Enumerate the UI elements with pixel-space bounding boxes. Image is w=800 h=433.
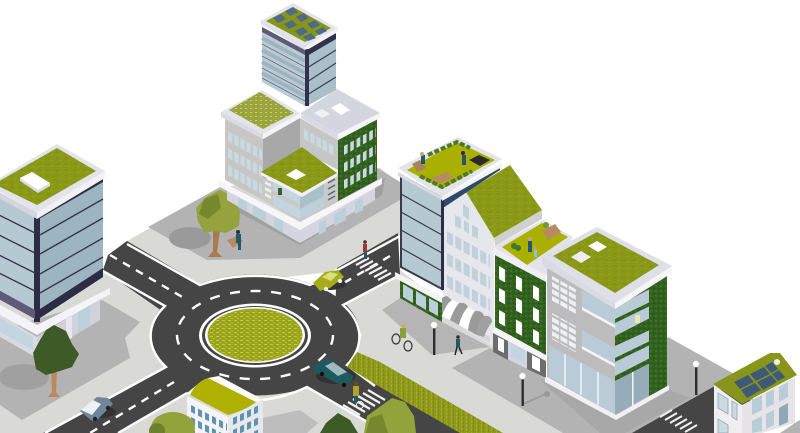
- corner building with ivy bands: [542, 227, 672, 420]
- tree: right bottom: [364, 398, 416, 433]
- gable wall: [443, 192, 494, 347]
- base slab: [545, 377, 669, 420]
- wall windows: [499, 266, 546, 356]
- cyclist: sidewalk: [392, 324, 412, 351]
- bottom trees: [149, 398, 416, 433]
- roof terrace: [493, 220, 573, 282]
- shop windows under awnings: [447, 312, 490, 343]
- pedestrian: sidewalk: [455, 335, 462, 355]
- gable roof: [466, 165, 542, 238]
- tree: left bottom: [149, 412, 195, 433]
- roof: [542, 227, 672, 309]
- glass tower with roof garden: [395, 137, 502, 322]
- hedge along road: [347, 352, 503, 433]
- roundabout island: [199, 304, 311, 368]
- tree: light green with bench: [169, 190, 240, 257]
- car: silver: [80, 397, 116, 421]
- crosswalk: north-east: [356, 258, 391, 280]
- small house with solar roof: [713, 353, 797, 433]
- bottom yellow-roof building: [187, 376, 263, 433]
- person on bench: [227, 230, 243, 250]
- roof: [0, 144, 105, 219]
- base walls: [0, 288, 110, 358]
- flower roof slab: [221, 90, 300, 139]
- left office building with green roof: [0, 144, 110, 358]
- ground: plazas: [0, 168, 800, 433]
- terrace with green roof: [261, 147, 338, 222]
- street lamp 3: [693, 361, 699, 395]
- car: teal: [312, 358, 356, 387]
- roof: [398, 137, 502, 201]
- ivy-wall building with roof terrace: [493, 220, 573, 378]
- top glass tower: [261, 3, 338, 106]
- tree: dark bottom: [320, 413, 358, 433]
- ground: sidewalks: [0, 168, 572, 433]
- crosswalk: far right: [660, 410, 697, 432]
- roundabout and roads: [43, 233, 750, 433]
- car: yellow: [313, 270, 346, 291]
- base: [493, 327, 546, 378]
- left face: [547, 265, 615, 415]
- street lamp 1: [431, 322, 437, 355]
- main walls: [225, 118, 377, 201]
- central complex: [218, 3, 382, 243]
- light roof slab: [301, 89, 380, 140]
- upper gable windows: [455, 204, 478, 239]
- crosswalk: south-east: [343, 390, 385, 415]
- striped awnings: [437, 296, 492, 337]
- glass faces: [0, 176, 103, 322]
- glass face: [401, 175, 444, 290]
- road edge lines: [45, 236, 400, 433]
- pedestrian: crosswalk north-east: [363, 240, 367, 259]
- tree: dark green: [0, 325, 79, 397]
- roof lip: [494, 210, 542, 246]
- ivy wall: [495, 255, 546, 355]
- cyclist: crosswalk: [353, 382, 364, 408]
- awnings and gabled building: [437, 165, 542, 347]
- lane dashes: [90, 255, 390, 433]
- right face: [615, 275, 667, 415]
- base with ivy: [395, 272, 442, 322]
- base level: [218, 178, 382, 243]
- street lamp 2: [519, 373, 550, 406]
- dark rear face: [442, 165, 500, 208]
